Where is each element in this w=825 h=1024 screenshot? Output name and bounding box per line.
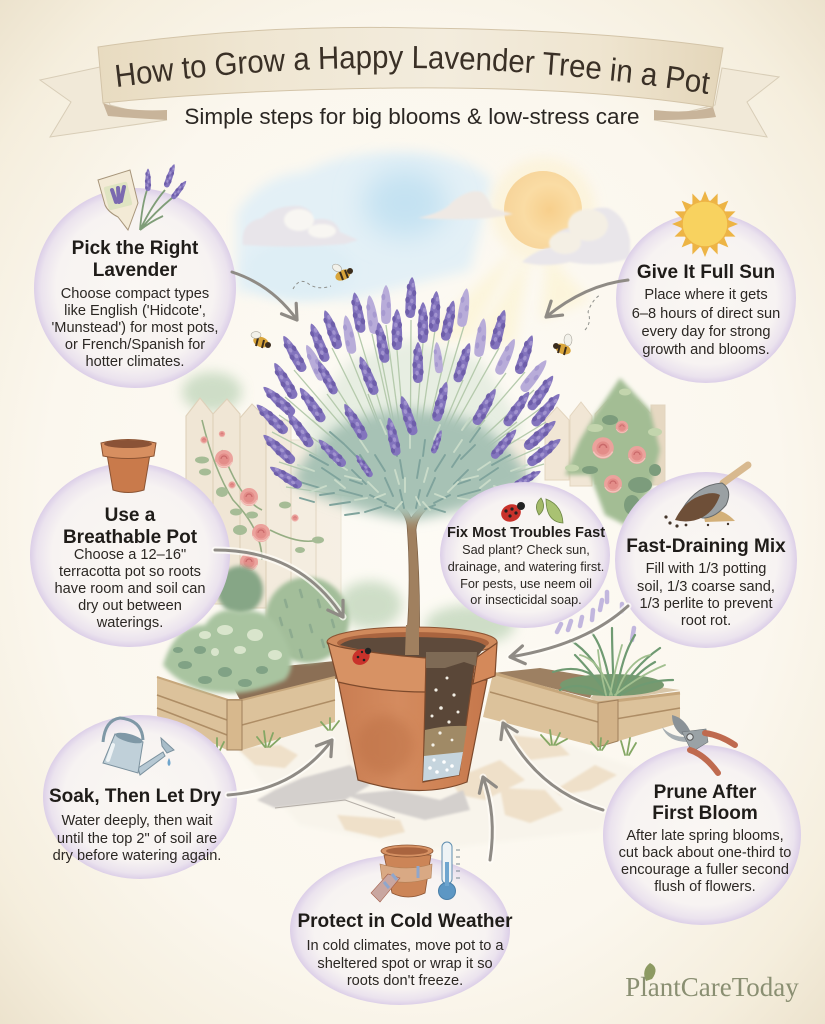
arrow: draining mix to pot	[510, 606, 628, 657]
pot right rim	[473, 643, 497, 684]
logo: PlantCareToday	[625, 972, 799, 1002]
pot back rim	[327, 627, 497, 657]
ribbon	[98, 27, 723, 107]
icon: scoop with soil	[664, 465, 748, 528]
trunk	[393, 503, 431, 655]
body: drainage, and watering first.	[448, 560, 604, 574]
body: Choose compact types	[61, 286, 209, 302]
heading: Fast-Draining Mix	[626, 536, 786, 557]
heading: Protect in Cold Weather	[297, 911, 513, 932]
pot shading	[357, 715, 413, 775]
panel: give it full sun	[616, 191, 796, 383]
body: Water deeply, then wait	[62, 813, 212, 829]
body: dry out between	[78, 598, 182, 614]
sky wash	[237, 153, 492, 300]
panel: fast-draining mix	[615, 465, 797, 648]
body: roots don't freeze.	[347, 973, 463, 989]
body: Fill with 1/3 potting	[646, 561, 766, 577]
icon: plant tag and lavender	[98, 163, 189, 230]
lavender tree	[253, 277, 564, 655]
icon: pruning shears	[662, 715, 735, 773]
heading: Breathable Pot	[63, 527, 198, 548]
panel: prune after first bloom	[603, 715, 801, 925]
body: like English ('Hidcote',	[64, 303, 206, 319]
left tail	[40, 67, 167, 137]
icon: ladybug and leaf	[499, 498, 563, 524]
silver leaves	[300, 428, 520, 515]
lavender spikes	[253, 277, 564, 491]
heading: Prune After	[654, 782, 757, 803]
rose bush right	[565, 378, 662, 525]
body: terracotta pot so roots	[59, 564, 201, 580]
body: cut back about one-third to	[619, 845, 791, 861]
panel: soak then let dry	[43, 715, 237, 879]
sun in the sky	[491, 158, 595, 262]
heading: First Bloom	[652, 803, 758, 824]
body: After late spring blooms,	[626, 828, 784, 844]
body: dry before watering again.	[53, 848, 221, 864]
bees	[251, 263, 600, 356]
stems	[272, 320, 546, 505]
title: How to Grow a Happy Lavender Tree in a Pot	[116, 46, 710, 94]
heading: Lavender	[93, 260, 178, 281]
paving stones	[235, 720, 640, 850]
right curl	[654, 107, 716, 120]
sun rays	[420, 245, 590, 345]
distant green	[182, 372, 515, 645]
terracotta pot	[327, 625, 497, 791]
left curl	[103, 103, 167, 120]
heading: Pick the Right	[72, 238, 199, 259]
body: 6–8 hours of direct sun	[632, 306, 780, 322]
body: or French/Spanish for	[65, 337, 205, 353]
bushes left	[163, 566, 349, 693]
body: For pests, use neem oil	[460, 577, 592, 591]
body: In cold climates, move pot to a	[306, 938, 504, 954]
fence right	[505, 400, 665, 500]
body: 'Munstead') for most pots,	[52, 320, 218, 336]
body: waterings.	[96, 615, 163, 631]
banner	[39, 26, 780, 138]
icon: wrapped pot and thermometer	[371, 842, 460, 902]
icon: sun	[672, 191, 738, 257]
body: Choose a 12–16"	[74, 547, 186, 563]
raised bed right	[483, 668, 680, 747]
trunk base	[405, 625, 419, 655]
arrow: pick lavender to tree	[232, 272, 297, 320]
panel: fix most troubles fast	[440, 482, 610, 628]
body: hotter climates.	[86, 354, 184, 370]
heading: Soak, Then Let Dry	[49, 786, 221, 807]
panel: protect in cold weather	[290, 842, 513, 1005]
foliage mass	[292, 410, 532, 520]
body: Sad plant? Check sun,	[462, 543, 590, 557]
arrow: prune to pot	[503, 723, 603, 810]
body: or insecticidal soap.	[470, 593, 582, 607]
arrow halos	[215, 550, 628, 860]
body: have room and soil can	[55, 581, 205, 597]
body: soil, 1/3 coarse sand,	[637, 579, 775, 595]
arrow: sun to tree	[546, 280, 628, 317]
arrow: breathable pot to pot	[215, 550, 343, 617]
upper foliage haze	[300, 340, 525, 460]
heading: Use a	[105, 505, 156, 526]
heading: Fix Most Troubles Fast	[447, 525, 605, 541]
ladybug on the rim	[349, 646, 373, 668]
pot inner	[337, 632, 489, 654]
heading: Give It Full Sun	[637, 262, 775, 283]
icon: terracotta pot	[101, 440, 156, 492]
panel: pick the right lavender	[34, 163, 236, 388]
fence left	[186, 398, 341, 630]
body: Place where it gets	[644, 287, 768, 303]
raised bed left	[157, 660, 345, 750]
body: every day for strong	[642, 324, 770, 340]
right tail	[654, 68, 779, 137]
icon: watering can	[103, 718, 174, 775]
body: flush of flowers.	[654, 879, 756, 895]
pot body	[338, 680, 487, 791]
grasses right	[553, 592, 673, 696]
soil cutaway	[423, 652, 477, 782]
climbing roses left	[195, 420, 324, 571]
body: growth and blooms.	[642, 342, 770, 358]
soil	[340, 637, 486, 660]
subtitle: Simple steps for big blooms & low-stress care	[184, 104, 640, 129]
body: encourage a fuller second	[621, 862, 789, 878]
clouds	[243, 191, 630, 265]
body: until the top 2" of soil are	[57, 831, 217, 847]
body: sheltered spot or wrap it so	[317, 956, 493, 972]
body: root rot.	[681, 613, 731, 629]
panel: use a breathable pot	[30, 440, 230, 647]
arrow: soak to pot	[228, 740, 332, 795]
grass tufts	[209, 718, 636, 755]
body: 1/3 perlite to prevent	[639, 596, 773, 612]
pot front rim	[328, 643, 426, 692]
garden scene	[157, 153, 680, 850]
arrow: cold weather to pot	[483, 777, 492, 860]
